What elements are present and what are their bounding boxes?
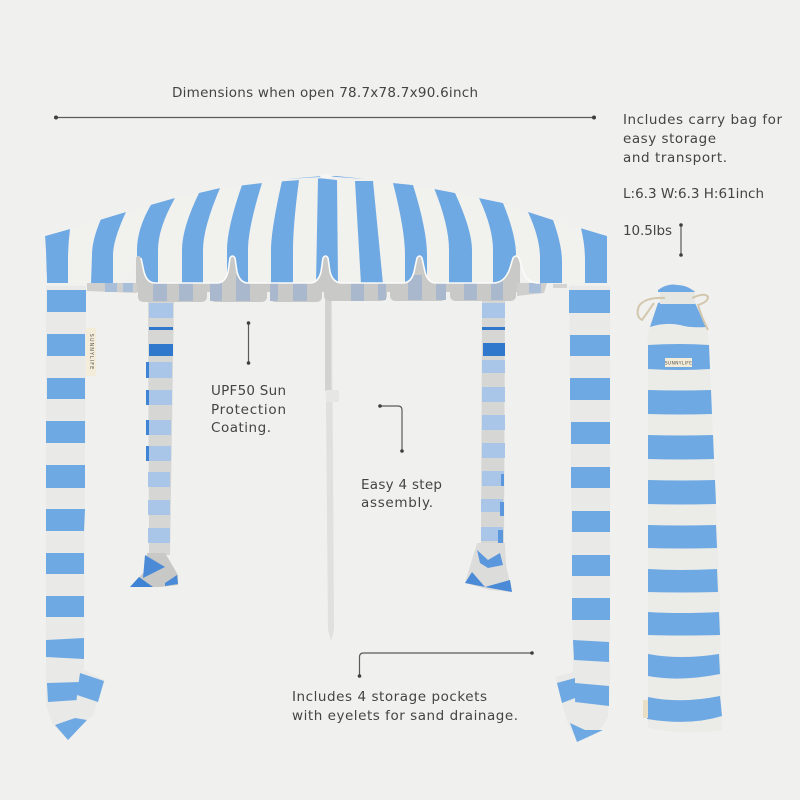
front left leg bbox=[46, 286, 105, 740]
text: UPF bbox=[211, 383, 286, 436]
back right foot bbox=[465, 543, 512, 592]
callout line: pockets bbox=[358, 651, 534, 678]
text: pockets bbox=[292, 689, 518, 724]
bag neck bbox=[658, 285, 695, 304]
text: carry bag bbox=[623, 112, 782, 166]
text: bag dimensions: L:6.3 W:6.3 H:61inch bbox=[623, 186, 764, 202]
back left foot bbox=[130, 553, 178, 587]
bag label: SUNNYLIFE bbox=[665, 360, 692, 366]
text: carry bag: and transport. bbox=[623, 150, 727, 166]
callout line: assembly bbox=[378, 404, 404, 453]
front left pocket bbox=[55, 669, 105, 740]
canopy scalloped edge bbox=[141, 256, 540, 283]
heading: dimensions: Dimensions when open 78.7x78.7x90.6inch bbox=[172, 85, 478, 101]
canopy top cap bbox=[287, 174, 365, 179]
text: UPF: UPF50 Sun bbox=[211, 383, 286, 399]
back left leg bbox=[130, 300, 178, 587]
text: assembly bbox=[361, 477, 442, 511]
text: carry bag: easy storage bbox=[623, 131, 716, 147]
canopy bbox=[45, 176, 607, 284]
text: carry bag: Includes carry bag for bbox=[623, 112, 782, 128]
front right pocket bbox=[555, 672, 603, 742]
back right leg bbox=[465, 300, 512, 592]
dimension line bbox=[54, 116, 596, 120]
umbrella pole bbox=[325, 296, 339, 641]
text: assembly: assembly. bbox=[361, 495, 433, 511]
sunnylife leg label bbox=[86, 328, 96, 376]
sunnylife leg label: SUNNYLIFE bbox=[88, 334, 94, 370]
bag label bbox=[665, 358, 692, 367]
text: pockets: with eyelets for sand drainage. bbox=[292, 708, 518, 724]
bag stripes bbox=[647, 344, 722, 722]
carry bag bbox=[638, 285, 722, 733]
bag shoulder bbox=[650, 300, 706, 327]
bag side tag bbox=[643, 700, 648, 718]
front right leg bbox=[555, 286, 610, 742]
text: UPF: Protection bbox=[211, 402, 286, 418]
text: UPF: Coating. bbox=[211, 420, 271, 436]
canopy underside valance bbox=[87, 255, 567, 302]
callout line: UPF bbox=[247, 321, 250, 365]
text: weight: 10.5lbs bbox=[623, 223, 672, 239]
text: pockets: Includes 4 storage pockets bbox=[292, 689, 487, 705]
text: assembly: Easy 4 step bbox=[361, 477, 442, 493]
bag drawstrings bbox=[638, 295, 708, 330]
callout line: weight bbox=[679, 223, 683, 257]
